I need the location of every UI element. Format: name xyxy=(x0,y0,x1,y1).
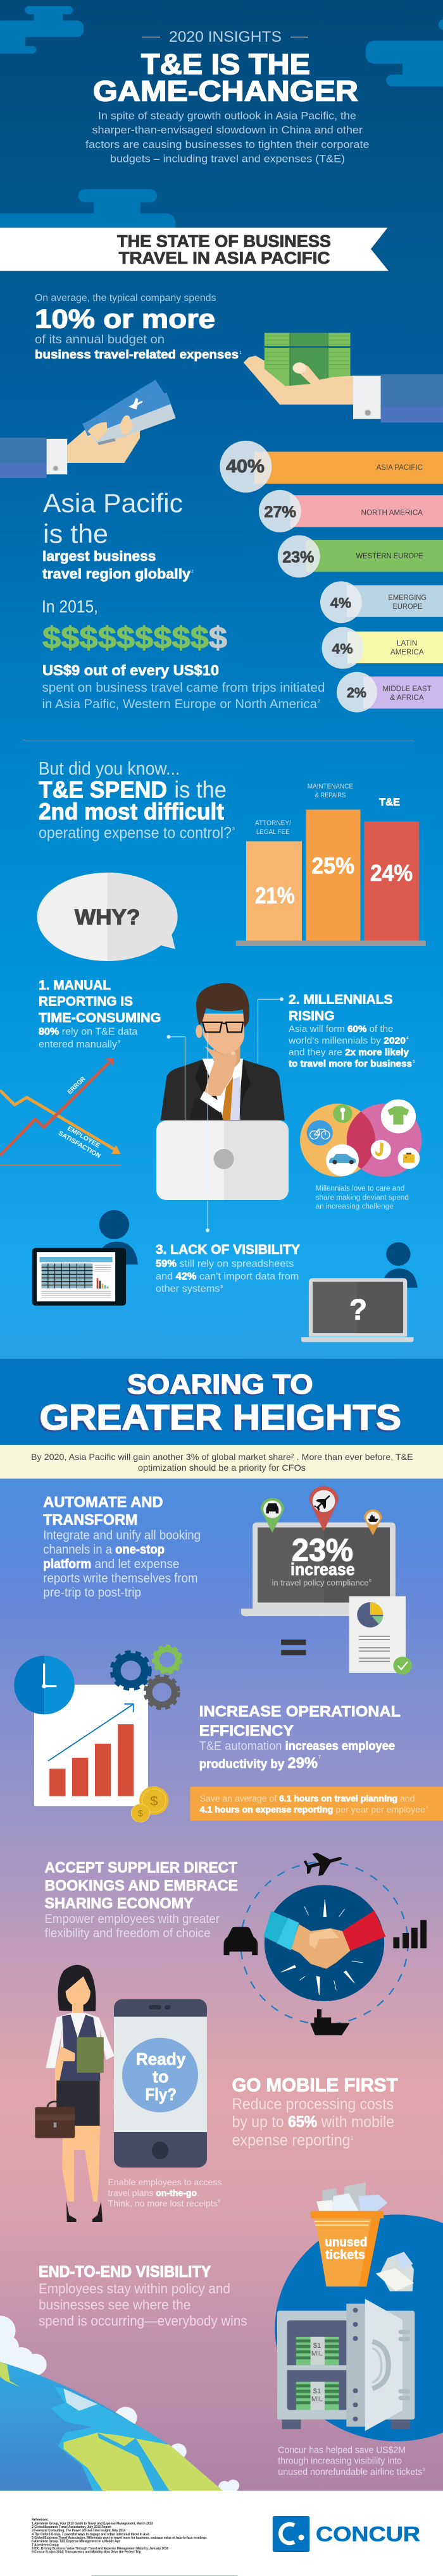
illustration: unused tickets and safe xyxy=(275,2183,443,2477)
section: automate and transform: pre-trip to post-trip xyxy=(43,1586,141,1600)
icon: gears xyxy=(114,1647,180,1707)
reason 2: millennials rising: RISING xyxy=(289,1008,335,1023)
callout: hours saved: 4.1 hours on expense reporting per year per employee xyxy=(200,1805,425,1815)
icon: person with question mark laptop: ? xyxy=(349,1293,367,1326)
illustration: smartphone ready to fly: Fly? xyxy=(146,2085,177,2104)
icon: coins xyxy=(131,1786,169,1822)
icon: person with spreadsheet tablet xyxy=(32,1210,138,1306)
line chart: error up, employee satisfaction down xyxy=(0,1058,121,1165)
illustration: smartphone ready to fly: Ready xyxy=(136,2050,185,2069)
references xyxy=(32,2518,207,2555)
venn diagram: sharing economy icons xyxy=(300,1100,421,1211)
section: increase operational efficiency: productivity by 29% xyxy=(199,1755,318,1772)
reason 2: millennials rising: 5 xyxy=(413,1060,415,1064)
reason 1: manual reporting: REPORTING IS xyxy=(39,994,133,1009)
icon: plane pin xyxy=(309,1487,339,1531)
bar chart: difficult operating expenses: MAINTENANCE xyxy=(308,783,353,790)
text block: in 2015 US$9 out of every US$10 xyxy=(42,596,325,711)
bar chart: difficult operating expenses xyxy=(236,783,426,946)
illustration: laptop with pins and 23% increase: in travel policy compliance xyxy=(272,1578,369,1587)
callout: hours saved xyxy=(190,1787,443,1821)
illustration: laptop with pins and 23% increase xyxy=(241,1487,396,1616)
illustration: thoughtful businessman at laptop xyxy=(156,983,289,1200)
section: automate and transform: Integrate and unify all booking xyxy=(43,1529,201,1543)
band: soaring to greater heights: SOARING TO xyxy=(127,1369,313,1400)
icon: ship pin xyxy=(364,1509,382,1535)
section: go mobile first: Enable employees to access xyxy=(108,2177,222,2187)
section: end-to-end visibility: END-TO-END VISIBILITY xyxy=(39,2263,211,2281)
illustration: unused tickets and safe: MIL xyxy=(311,2350,323,2357)
bar: North America 27%: NORTH AMERICA xyxy=(361,508,423,517)
title: GAME-CHANGER xyxy=(93,75,358,107)
icon: equals sign xyxy=(281,1640,306,1655)
section: end-to-end visibility xyxy=(39,2263,247,2329)
banner: the state of business travel in Asia Pacific: TRAVEL IN ASIA PACIFIC xyxy=(119,248,330,267)
icon: report document with pie chart xyxy=(349,1596,412,1674)
text block: Asia Pacific largest region: 2 xyxy=(191,570,194,574)
bar: Emerging Europe 4%: EUROPE xyxy=(392,602,422,611)
illustration: unused tickets and safe: unused xyxy=(325,2236,367,2250)
section: go mobile first: 8 xyxy=(218,2199,220,2204)
icon: orange bin xyxy=(311,2211,384,2286)
logo: Concur xyxy=(273,2516,420,2552)
section: automate and transform: TRANSFORM xyxy=(43,1512,137,1529)
text block: in 2015 US$9 out of every US$10: 2 xyxy=(318,699,320,704)
section: increase operational efficiency: INCREASE OPERATIONAL xyxy=(199,1703,401,1720)
section: go mobile first: GO MOBILE FIRST xyxy=(232,2075,398,2096)
text block: Asia Pacific largest region xyxy=(42,488,194,582)
illustration: unused tickets and safe: $1 xyxy=(313,2388,321,2395)
section: go mobile first: expense reporting xyxy=(232,2131,351,2149)
reason 3: lack of visibility xyxy=(156,1242,300,1294)
band: priority for CFOs: optimization should be a priority for CFOs xyxy=(138,1463,306,1473)
text block: 10% of annual budget: On average, the typical company spends xyxy=(35,293,216,304)
text block: T&E spend second most difficult: is the xyxy=(174,777,227,803)
bar chart: difficult operating expenses: T&E xyxy=(379,796,400,808)
band: soaring to greater heights xyxy=(0,1359,443,1445)
connector lines xyxy=(167,998,284,1232)
reason 2: millennials rising: 4 xyxy=(406,1036,409,1041)
text block: T&E spend second most difficult: 2nd most difficult xyxy=(39,799,224,825)
speech bubble: why: WHY? xyxy=(75,905,140,929)
bar: Asia Pacific 40% xyxy=(220,441,443,493)
reason 3: lack of visibility: 59% still rely on spreadsheets xyxy=(156,1259,294,1270)
reason 2: millennials rising: world's millennials by 2020 xyxy=(288,1036,406,1046)
icon: car xyxy=(326,1144,359,1176)
references: 9 Concur Fusion 2014: Transparency and Mobility Now Drive the Perfect Trip xyxy=(32,2551,141,2555)
illustration: laptop with pins and 23% increase: increase xyxy=(290,1560,355,1579)
venn diagram: sharing economy icons: share making deviant spend xyxy=(316,1194,409,1201)
icon: saxophone xyxy=(371,1140,391,1160)
bar: Middle East and Africa 2%: 2% xyxy=(347,685,366,701)
section: accept supplier direct bookings: BOOKINGS AND EMBRACE xyxy=(44,1877,238,1894)
bar: Asia Pacific 40%: 40% xyxy=(226,457,265,477)
bar: Middle East and Africa 2%: & AFRICA xyxy=(390,693,424,702)
references: 8 IDC, Driving Business Value Through Travel and Expense Management Maturity, January 2016 xyxy=(32,2547,168,2551)
reason 3: lack of visibility: other systems xyxy=(156,1284,220,1294)
bar: Latin America 4%: 4% xyxy=(332,641,353,656)
bar: Western Europe 23% xyxy=(278,535,443,578)
icon: person with question mark laptop xyxy=(301,1242,418,1342)
section: automate and transform: AUTOMATE AND xyxy=(43,1493,163,1511)
references: 5 Global Business Travel Association, Millennials want to travel more for business, embrace value of face-to-face meetings xyxy=(32,2536,207,2540)
section: end-to-end visibility: Employees stay within policy and xyxy=(39,2281,230,2297)
text block: 10% of annual budget: 10% or more xyxy=(35,304,215,333)
intro paragraph: In spite of steady growth outlook in Asia Pacific, the xyxy=(98,111,356,122)
panel: header xyxy=(0,6,443,228)
band: soaring to greater heights: GREATER HEIGHTS xyxy=(39,1397,401,1438)
illustration: laptop with pins and 23% increase: 23% xyxy=(292,1533,353,1568)
clouds xyxy=(0,6,443,228)
panel: regional share bars xyxy=(220,441,443,713)
bar: Middle East and Africa 2%: MIDDLE EAST xyxy=(382,684,432,693)
icon: coins: $ xyxy=(150,1793,158,1808)
references: 6 Aberdeen Group, T&E Expense Management in a Mobile Age xyxy=(32,2540,120,2544)
section: go mobile first: 1 xyxy=(351,2135,354,2141)
reason 3: lack of visibility: 3. LACK OF VISIBILITY xyxy=(156,1242,300,1257)
section: increase operational efficiency: EFFICIENCY xyxy=(199,1722,294,1739)
illustration: clock gears and growth chart xyxy=(14,1647,180,2079)
icon: plane xyxy=(302,1847,345,1879)
icon: car xyxy=(224,1927,258,1955)
footer xyxy=(0,2491,443,2576)
section: automate and transform: channels in a one-stop xyxy=(43,1543,165,1557)
intro paragraph: factors are causing businesses to tighten their corporate xyxy=(85,139,370,150)
venn diagram: sharing economy icons: Millennials love to care and xyxy=(316,1185,404,1193)
bar: North America 27%: 27% xyxy=(264,503,296,521)
bar: Latin America 4%: AMERICA xyxy=(390,647,424,656)
section: automate and transform xyxy=(43,1493,201,1600)
reason 2: millennials rising: to travel more for business xyxy=(289,1058,412,1069)
bar: Latin America 4%: LATIN xyxy=(397,639,417,647)
text block: Asia Pacific largest region: largest business xyxy=(42,548,156,564)
section: accept supplier direct bookings: Empower employees with greater xyxy=(44,1912,220,1926)
dollar sign pictogram: $$$$$$$$$ $ xyxy=(42,622,227,655)
text block: T&E spend second most difficult: operating expense to control? xyxy=(39,824,232,842)
section: automate and transform: platform and let expense xyxy=(43,1557,180,1571)
illustration: smartphone ready to fly: to xyxy=(153,2067,168,2086)
section: automate and transform: reports write themselves from xyxy=(43,1571,197,1585)
references: 2 Global Business Travel Association, July 2016 Report xyxy=(32,2525,111,2529)
references: 4 The Oxford Group, 7 powerful ways to engage and retain millennial talent in Asia xyxy=(32,2532,150,2536)
text block: in 2015 US$9 out of every US$10: US$9 out of every US$10 xyxy=(42,662,219,678)
section: accept supplier direct bookings xyxy=(44,1860,238,1940)
reason 1: manual reporting: 1. MANUAL xyxy=(39,978,111,993)
title xyxy=(93,48,358,107)
references: 3 Forrester Consulting, The Power of Real-Time Insight, May 2014 xyxy=(32,2529,125,2533)
illustration: unused tickets and safe: through increasing visibility into xyxy=(278,2456,402,2467)
callout: hours saved: 1 xyxy=(426,1805,428,1810)
bar: Western Europe 23%: WESTERN EUROPE xyxy=(356,551,423,560)
text block: T&E spend second most difficult: T&E SPEND xyxy=(39,777,167,803)
illustration: businesswoman with briefcase xyxy=(35,1965,115,2222)
icon: crumpled paper xyxy=(316,2183,414,2291)
icon: signal bars xyxy=(393,1920,427,1948)
bar chart: difficult operating expenses: LEGAL FEE xyxy=(256,828,290,836)
intro paragraph: budgets – including travel and expenses (T&E) xyxy=(110,154,345,165)
icon: key xyxy=(333,1104,353,1123)
reason 3: lack of visibility: and 42% can't import data from xyxy=(156,1272,299,1282)
illustration: unused tickets and safe: 9 xyxy=(423,2468,425,2472)
section: go mobile first xyxy=(108,2075,398,2208)
references: 7 Aberdeen Group xyxy=(32,2543,59,2547)
bar: Asia Pacific 40%: ASIA PACIFIC xyxy=(377,463,423,472)
title: T&E IS THE xyxy=(141,48,310,80)
text block: 10% of annual budget: of its annual budget on xyxy=(35,333,165,347)
illustration: unused tickets and safe: tickets xyxy=(325,2248,365,2262)
reason 2: millennials rising: Asia will form 60% of the xyxy=(289,1024,393,1034)
venn diagram: sharing economy icons: an increasing challenge xyxy=(316,1203,394,1211)
logo: Concur: CONCUR xyxy=(316,2522,420,2546)
illustration: unused tickets and safe: MIL xyxy=(311,2395,323,2403)
icon: safe xyxy=(277,2299,415,2431)
text block: 10% of annual budget: 1 xyxy=(239,351,242,355)
line chart: error up, employee satisfaction down: SATISFACTION xyxy=(57,1130,102,1160)
line chart: error up, employee satisfaction down: EMPLOYEE xyxy=(66,1125,101,1150)
band: soaring to greater heights: SOARING TO xyxy=(125,1370,311,1401)
bar chart: difficult operating expenses: 25% xyxy=(311,853,354,879)
illustration: unused tickets and safe: Concur has helped save US$2M xyxy=(278,2444,406,2456)
bar: Middle East and Africa 2% xyxy=(337,672,443,713)
icon: car pin xyxy=(261,1498,284,1533)
line chart: error up, employee satisfaction down: ERROR xyxy=(66,1076,87,1096)
references: 1 Aberdeen Group, Your 2013 Guide to Travel and Expense Management, March 2013 xyxy=(32,2522,153,2525)
reason 2: millennials rising: 2. MILLENNIALS xyxy=(289,992,392,1007)
bar: Latin America 4% xyxy=(321,627,443,669)
bar: Emerging Europe 4%: EMERGING xyxy=(388,593,427,602)
reason 3: lack of visibility: 3 xyxy=(220,1285,223,1289)
banner: the state of business travel in Asia Pacific xyxy=(0,228,389,271)
section: go mobile first: Reduce processing costs xyxy=(232,2095,394,2113)
text block: T&E spend second most difficult xyxy=(39,759,235,842)
reason 2: millennials rising: and they are 2x more likely xyxy=(289,1047,409,1058)
illustration: smartphone ready to fly xyxy=(114,1999,207,2168)
illustration: globe with clouds xyxy=(0,2315,239,2493)
section: go mobile first: Think, no more lost receipts xyxy=(108,2198,218,2208)
text block: in 2015 US$9 out of every US$10: in Asia Paific, Western Europe or North America xyxy=(42,697,318,711)
band: priority for CFOs: By 2020, Asia Pacific will gain another 3% of global market share² . More than ever before, T&E xyxy=(31,1452,413,1462)
text block: T&E spend second most difficult: But did you know... xyxy=(39,759,180,779)
icon: coins: $ xyxy=(138,1808,143,1819)
section: increase operational efficiency: 7 xyxy=(318,1755,321,1760)
text block: Asia Pacific largest region: travel region globally xyxy=(42,566,191,582)
text block: Asia Pacific largest region: Asia Pacific xyxy=(43,488,183,518)
section: end-to-end visibility: businesses see where the xyxy=(39,2297,190,2312)
section: go mobile first: by up to 65% with mobile xyxy=(232,2113,394,2131)
eyebrow: 2020 insights: 2020 INSIGHTS xyxy=(169,28,282,46)
text block: in 2015 US$9 out of every US$10: spent on business travel came from trips initiated xyxy=(42,681,325,695)
icon: hand holding money xyxy=(244,333,443,422)
intro paragraph xyxy=(85,111,370,165)
section: accept supplier direct bookings: ACCEPT SUPPLIER DIRECT xyxy=(44,1860,237,1877)
section: increase operational efficiency: T&E automation increases employee xyxy=(199,1740,395,1753)
intro paragraph: sharper-than-envisaged slowdown in China and other xyxy=(92,125,363,136)
illustration: laptop with pins and 23% increase: 6 xyxy=(369,1579,371,1583)
bar chart: difficult operating expenses: ATTORNEY/ xyxy=(255,819,292,827)
reason 1: manual reporting: entered manually xyxy=(39,1040,117,1050)
bar chart: difficult operating expenses: 24% xyxy=(370,860,413,886)
reason 1: manual reporting: 3 xyxy=(118,1040,120,1045)
text block: 10% of annual budget xyxy=(35,293,242,362)
section: accept supplier direct bookings: SHARING ECONOMY xyxy=(44,1895,194,1912)
reason 1: manual reporting: TIME-CONSUMING xyxy=(39,1010,161,1025)
illustration: unused tickets and safe: unused nonrefundable airline tickets xyxy=(278,2467,422,2477)
callout: hours saved: Save an average of 6.1 hours on travel planning and xyxy=(200,1794,415,1803)
section: increase operational efficiency xyxy=(199,1703,401,1772)
illustration: unused tickets and safe: $1 xyxy=(313,2342,321,2350)
reason 1: manual reporting xyxy=(39,978,161,1050)
text block: Asia Pacific largest region: is the xyxy=(43,519,108,549)
icon: t-shirt xyxy=(381,1100,416,1133)
section: accept supplier direct bookings: flexibility and freedom of choice xyxy=(44,1926,211,1940)
section: go mobile first: travel plans on-the-go. xyxy=(108,2188,199,2198)
bar: North America 27% xyxy=(259,490,443,532)
text block: T&E spend second most difficult: 3 xyxy=(232,827,235,831)
banner: the state of business travel in Asia Pacific: THE STATE OF BUSINESS xyxy=(117,231,331,250)
bar: Emerging Europe 4% xyxy=(320,581,443,623)
icon: suitcase xyxy=(398,1148,420,1169)
bar chart: difficult operating expenses: & REPAIRS xyxy=(315,792,346,799)
bar: Emerging Europe 4%: 4% xyxy=(330,595,351,611)
references: References: xyxy=(32,2518,49,2522)
bar: Western Europe 23%: 23% xyxy=(282,549,314,567)
bar chart: difficult operating expenses: 21% xyxy=(255,883,295,908)
icon: ship xyxy=(310,2009,350,2035)
band: soaring to greater heights: GREATER HEIGHTS xyxy=(38,1399,400,1440)
reason 1: manual reporting: 80% rely on T&E data xyxy=(39,1027,138,1038)
reason 2: millennials rising xyxy=(288,992,415,1069)
illustration: handshake with travel icons xyxy=(224,1847,427,2035)
text block: 10% of annual budget: business travel-related expenses xyxy=(35,348,239,362)
band: priority for CFOs xyxy=(0,1445,443,1478)
icon: hand holding boarding passes xyxy=(0,380,176,478)
icon: bicycle xyxy=(307,1120,333,1145)
text block: in 2015 US$9 out of every US$10: In 2015, xyxy=(42,596,98,616)
section: end-to-end visibility: spend is occurring—everybody wins xyxy=(39,2313,247,2329)
speech bubble: why xyxy=(37,873,178,961)
